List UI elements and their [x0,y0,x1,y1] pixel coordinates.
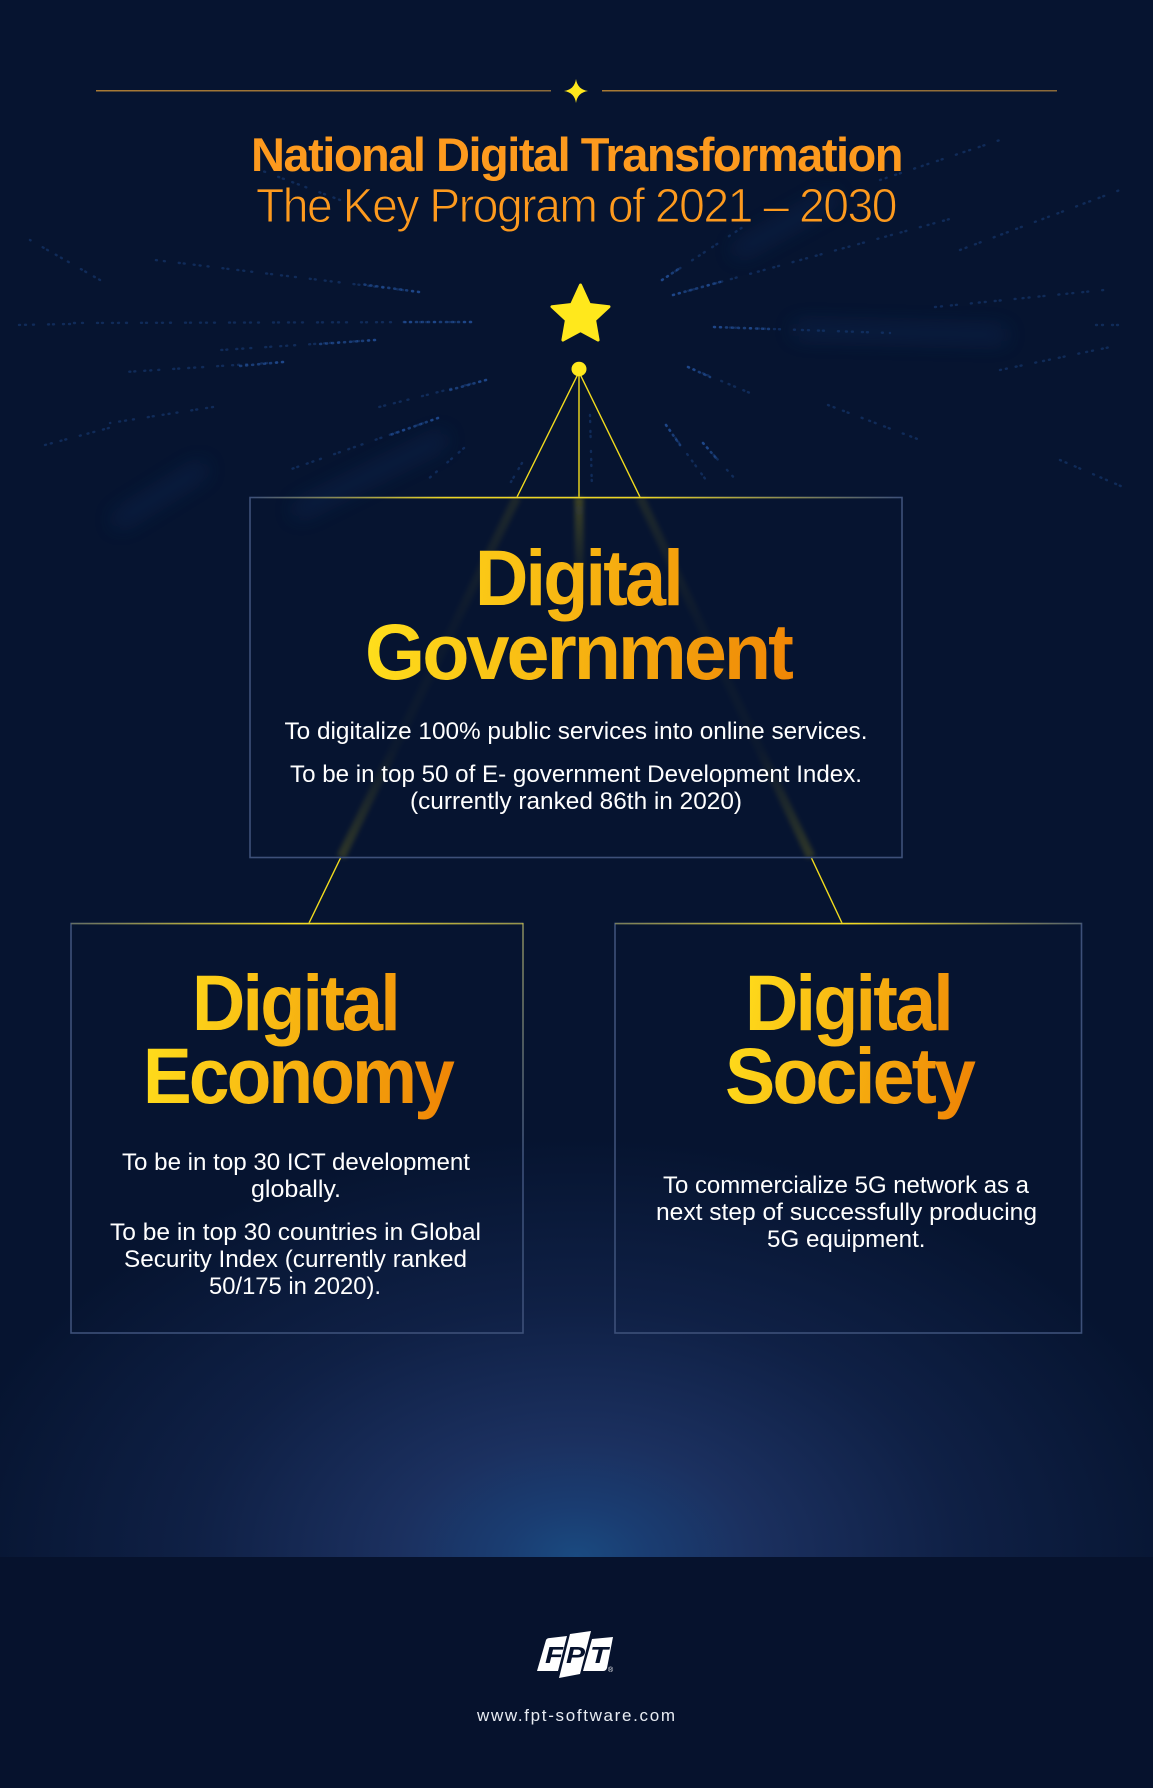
text: government goals: To digitalize 100% public services into online services. [284,718,868,745]
panel: digital society [615,923,1082,1333]
text: economy goals: 50/175 in 2020). [209,1273,381,1300]
logo: FPT: P [566,1642,586,1668]
heading: digital economy: Digital [192,958,398,1047]
text: government goals: To be in top 50 of E- government Development Index. [290,761,862,788]
title line 1: National Digital Transformation [251,128,902,181]
heading: digital society: Digital [745,958,951,1047]
text: government goals: (currently ranked 86th in 2020) [410,788,742,815]
heading: digital society: Society [725,1031,976,1120]
connectors to lower boxes [309,857,842,923]
logo: FPT: T [590,1642,610,1668]
text: economy goals: globally. [251,1176,341,1203]
title line 2: The Key Program of 2021 – 2030 [256,180,896,233]
icon: star [552,285,609,340]
logo: FPT: ® [608,1666,614,1674]
text: government goals [284,718,868,815]
heading: digital economy [143,958,455,1120]
text: society goals [656,1172,1037,1253]
bottom glow [0,1050,1153,1557]
text: economy goals: To be in top 30 ICT development [122,1149,470,1176]
heading: digital government [365,533,794,696]
heading: digital government: Government [365,607,794,696]
text: society goals: To commercialize 5G network as a [663,1172,1030,1199]
text: economy goals: To be in top 30 countries in Global [110,1219,481,1246]
heading: digital economy: Economy [143,1031,455,1120]
text: economy goals [110,1149,481,1300]
logo: FPT [537,1631,614,1678]
logo: FPT: F [545,1642,564,1668]
footer band [0,1557,1153,1788]
title [251,128,902,233]
heading: digital society [725,958,976,1120]
faint beams through government box [341,497,811,857]
top divider with sparkle [96,79,1057,103]
website url: www.fpt-software.com [476,1706,675,1725]
text: economy goals: Security Index (currently ranked [124,1246,467,1273]
icon: sparkle [564,79,588,103]
panel: digital government [250,497,902,858]
text: society goals: next step of successfully producing [656,1199,1037,1226]
connector: dot and three lines to government box [517,362,640,497]
panel: digital economy [71,923,524,1333]
heading: digital government: Digital [475,533,681,622]
text: society goals: 5G equipment. [767,1226,926,1253]
